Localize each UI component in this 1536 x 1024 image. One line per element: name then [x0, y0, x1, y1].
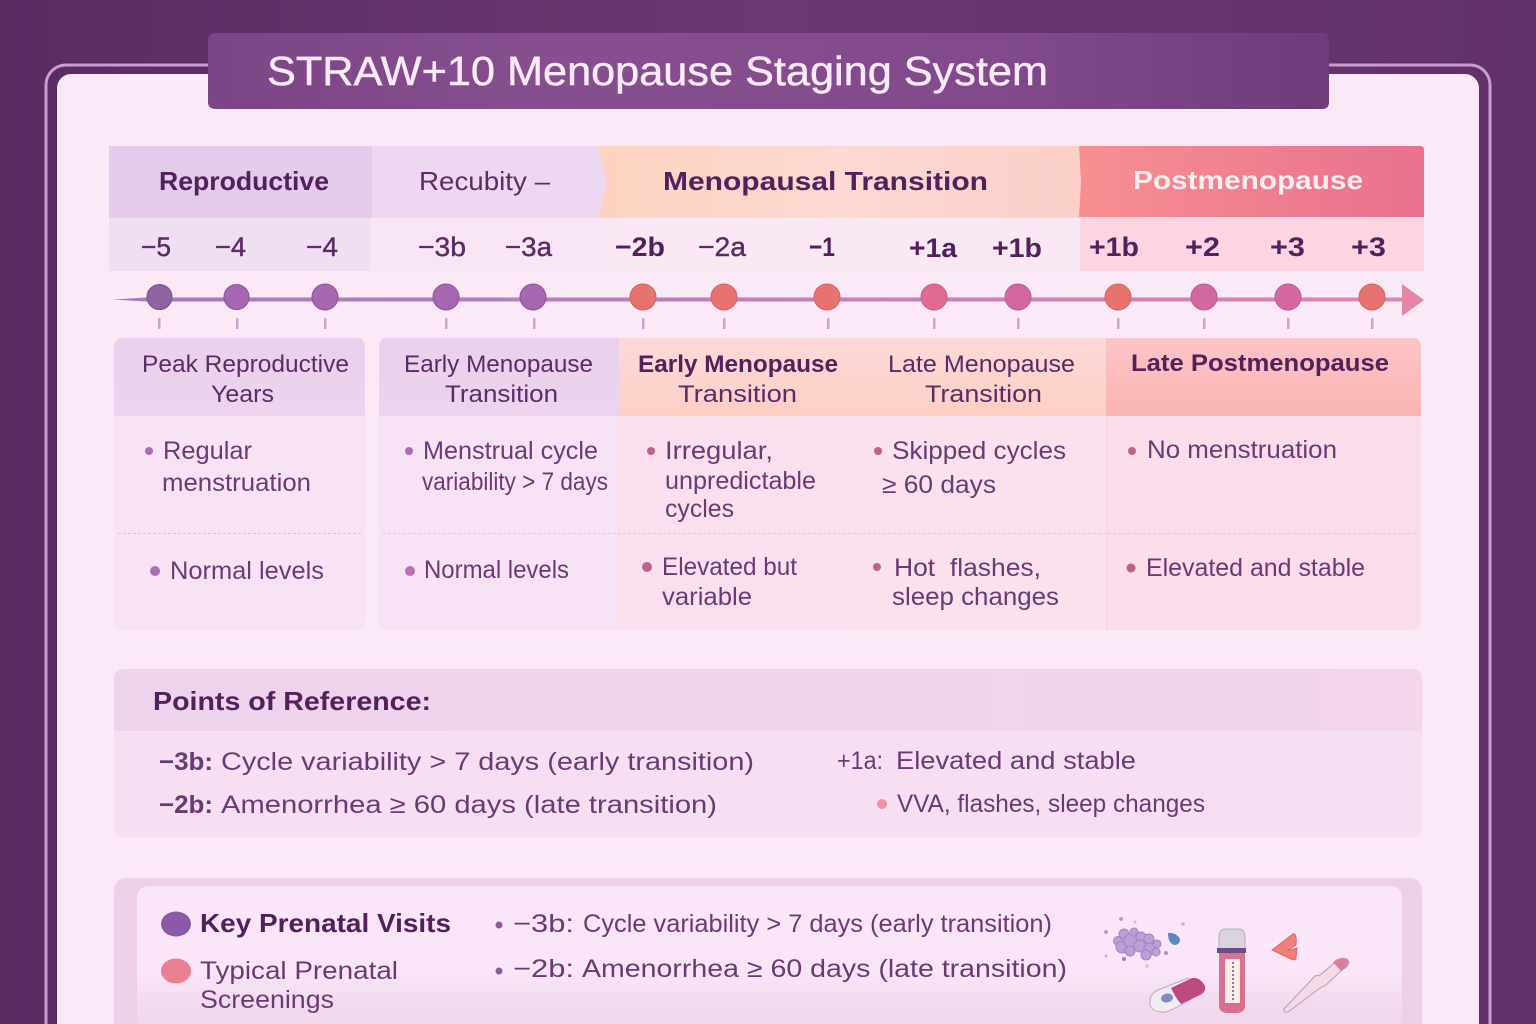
list item: -3b: −3b:: [513, 910, 574, 938]
stage numbers band: +1a: [909, 233, 958, 263]
list item: -2b: Amenorrhea ≥ 60 days (late transition): [582, 955, 1067, 983]
card: early menopause transition (variable): Menstrual cycle: [423, 437, 598, 465]
icon: pill cluster: [1104, 917, 1185, 968]
reference items: Cycle variability > 7 days (early transition): [221, 748, 754, 776]
legend: typical prenatal screenings: Typical Prenatal: [200, 957, 398, 985]
heading: Points of Reference:: [153, 686, 431, 716]
list item: -3b: Cycle variability > 7 days (early transition): [583, 910, 1052, 938]
card: late postmenopause: Late Postmenopause: [1131, 350, 1389, 377]
panel: points of reference: [114, 669, 1422, 837]
panel: peak reproductive years: Normal levels: [170, 557, 324, 585]
icon: red triangle: [1272, 934, 1297, 960]
stage numbers band: −2b: [615, 232, 665, 262]
panel: peak reproductive years: Peak Reproductive: [142, 351, 349, 378]
title banner: [208, 33, 1329, 109]
stage numbers band: −4: [306, 232, 338, 262]
stage: postmenopause: Postmenopause: [1133, 165, 1363, 195]
reference items: VVA, flashes, sleep changes: [897, 790, 1205, 818]
card: early menopause transition (irregular): cycles: [665, 495, 734, 523]
panel: peak reproductive years: menstruation: [162, 469, 311, 497]
stage: menopausal transition: [598, 146, 1083, 218]
icon: inhaler: [1150, 978, 1205, 1012]
card: early menopause transition (irregular): Elevated but: [662, 553, 797, 581]
stage: menopausal transition: Menopausal Transition: [663, 166, 988, 196]
stage numbers band: −1: [809, 232, 835, 262]
card: early menopause transition (irregular): Transition: [678, 381, 797, 408]
card: early menopause transition (irregular): [619, 338, 861, 611]
stage numbers band: +3: [1270, 232, 1305, 262]
stage: recubity: Recubity –: [419, 166, 551, 196]
arrowhead: [1402, 284, 1424, 316]
title: STRAW+10 Menopause Staging System: [267, 48, 1048, 94]
legend: typical prenatal screenings: [161, 957, 398, 1014]
legend: key prenatal visits: Key Prenatal Visits: [200, 908, 451, 938]
card: early menopause transition (variable): Transition: [445, 381, 558, 408]
stage numbers band: −5: [141, 232, 171, 262]
card: early menopause transition (irregular): Irregular,: [665, 437, 773, 465]
stage numbers band: −3b: [418, 232, 466, 262]
stage: postmenopause: [1079, 146, 1424, 217]
stage numbers band: [109, 218, 1424, 271]
card: early menopause transition (variable): Normal levels: [424, 556, 569, 584]
list item: -2b: −2b:: [513, 955, 574, 983]
card: early menopause transition (irregular): unpredictable: [665, 467, 816, 495]
card: early menopause transition (variable): [379, 338, 619, 584]
stage header band: [109, 146, 1424, 218]
card: late postmenopause: Elevated and stable: [1146, 554, 1365, 582]
card: early menopause transition (irregular): Early Menopause: [638, 351, 838, 378]
stage: recubity: [372, 146, 607, 218]
stage numbers band: +2: [1185, 232, 1220, 262]
panel: peak reproductive years: Years: [211, 381, 274, 408]
stage numbers band: +1b: [992, 233, 1042, 263]
reference items: [159, 747, 1205, 819]
icon: blue drop: [1168, 933, 1180, 945]
reference items: −2b:: [159, 791, 213, 819]
reference items: Elevated and stable: [896, 747, 1136, 775]
icon: thermometer: [1284, 958, 1349, 1012]
stage numbers band: +3: [1351, 232, 1386, 262]
stage numbers band: +1b: [1089, 232, 1139, 262]
legend: typical prenatal screenings: Screenings: [200, 986, 334, 1014]
card: late menopause transition: sleep changes: [892, 583, 1059, 611]
stage numbers band: −2a: [698, 232, 747, 262]
stage: reproductive: Reproductive: [159, 166, 329, 196]
stage numbers band: −4: [215, 232, 246, 262]
panel: peak reproductive years: Regular: [163, 437, 252, 465]
stage numbers band: −3a: [505, 232, 553, 262]
card: late postmenopause: No menstruation: [1147, 436, 1337, 464]
reference items: Amenorrhea ≥ 60 days (late transition): [221, 791, 717, 819]
card: early menopause transition (variable): Early Menopause: [404, 351, 593, 378]
timeline with stage markers: [113, 284, 1424, 329]
icon: sample tube: [1217, 929, 1246, 1013]
reference items: +1a:: [837, 747, 883, 775]
card: late menopause transition: Transition: [925, 381, 1042, 408]
panel: prenatal key: [114, 878, 1422, 1024]
card: late menopause transition: Late Menopause: [888, 351, 1075, 378]
panel: stages cards: [379, 338, 1421, 630]
card: late menopause transition: [861, 338, 1106, 611]
card: early menopause transition (variable): variability > 7 days: [422, 468, 608, 496]
panel: peak reproductive years: [114, 338, 365, 630]
card: late menopause transition: ≥ 60 days: [882, 471, 996, 499]
card: late menopause transition: Hot flashes,: [894, 554, 1041, 582]
stage: reproductive: [109, 146, 372, 218]
reference items: −3b:: [159, 748, 213, 776]
card: late postmenopause: [1106, 338, 1421, 582]
card: early menopause transition (irregular): variable: [662, 583, 752, 611]
card: late menopause transition: Skipped cycles: [892, 437, 1066, 465]
